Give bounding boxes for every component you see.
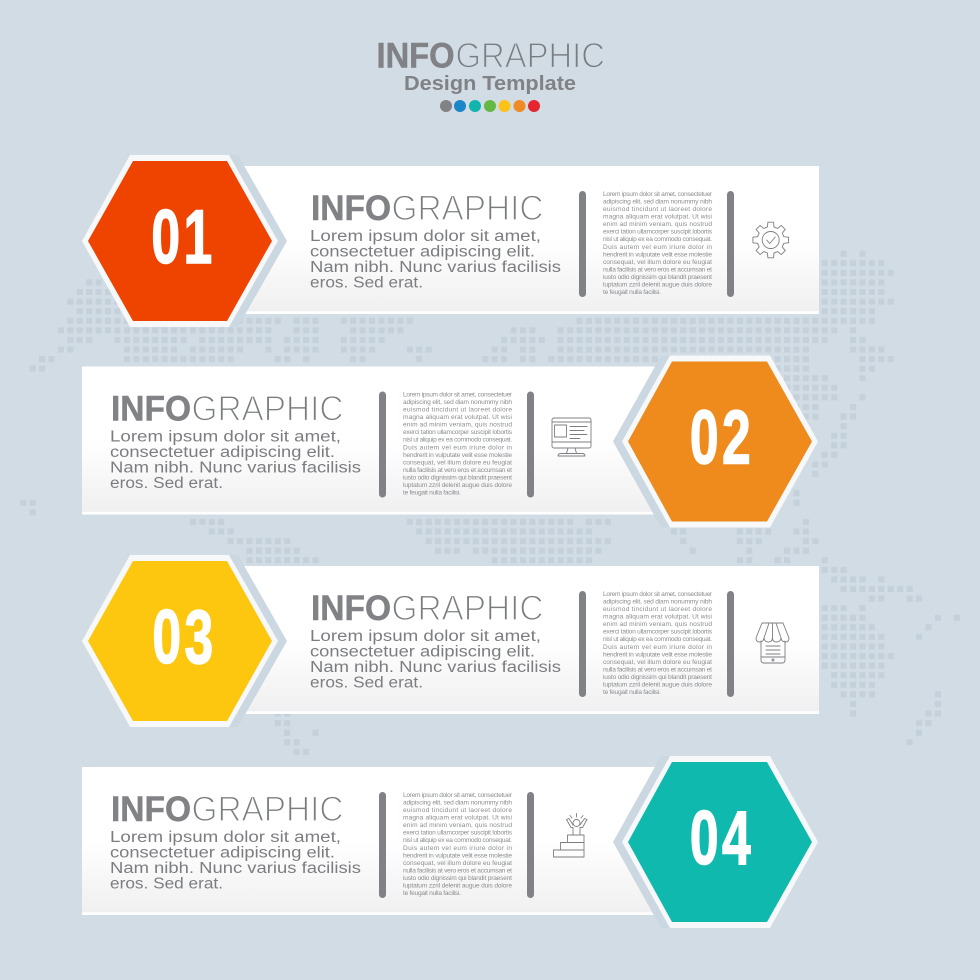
heading <box>111 390 344 428</box>
intro text: eros. Sed erat. <box>310 674 423 692</box>
panel background <box>240 566 819 714</box>
body text: hendrerit in vulputate velit esse molestie <box>603 251 712 258</box>
body text: hendrerit in vulputate velit esse molestie <box>603 651 712 658</box>
right divider bar <box>727 191 734 297</box>
body text: adipiscing elit, sed diam nonummy nibh <box>403 800 512 806</box>
body text: magna aliquam erat volutpat. Ut wisi <box>403 815 513 822</box>
intro text <box>110 829 361 892</box>
intro text: eros. Sed erat. <box>110 475 223 492</box>
body text: iusto odio dignissim qui blandit praesent <box>603 274 712 281</box>
body text: enim ad minim veniam, quis nostrud <box>403 822 512 829</box>
body text: hendrerit in vulputate velit esse molestie <box>403 452 512 459</box>
body text: nulla facilisis at vero eros et accumsan et <box>603 266 712 273</box>
left divider bar <box>379 792 386 898</box>
panel background <box>82 366 672 514</box>
body text <box>403 392 513 496</box>
body text: nisl ut aliquip ex ea commodo consequat. <box>603 236 712 243</box>
icon: person on top of stairs <box>554 814 587 857</box>
body text: magna aliquam erat volutpat. Ut wisi <box>603 614 713 621</box>
body text: exerci tation ullamcorper suscipit lobortis <box>403 429 513 436</box>
body text: consequat, vel illum dolore eu feugiat <box>403 459 512 466</box>
body text: Duis autem vel eum iriure dolor in <box>603 244 712 251</box>
body text: iusto odio dignissim qui blandit praesent <box>603 674 712 681</box>
icon: mobile storefront <box>756 623 789 663</box>
body text: consequat, vel illum dolore eu feugiat <box>603 259 712 266</box>
body text: consequat, vel illum dolore eu feugiat <box>603 659 712 666</box>
body text: exerci tation ullamcorper suscipit lobortis <box>603 229 713 236</box>
body text: Lorem ipsum dolor sit amet, consectetuer <box>403 392 513 398</box>
icon: desktop monitor <box>552 418 591 456</box>
heading <box>311 589 544 628</box>
number 03: 03 <box>152 594 217 679</box>
body text: enim ad minim veniam, quis nostrud <box>603 621 712 628</box>
body text: enim ad minim veniam, quis nostrud <box>403 422 512 429</box>
panel: step 03 <box>82 555 819 727</box>
body text: exerci tation ullamcorper suscipit lobortis <box>603 629 713 636</box>
intro text: consectetuer adipiscing elit. <box>110 444 335 461</box>
intro text: consectetuer adipiscing elit. <box>110 844 335 862</box>
body text: adipiscing elit, sed diam nonummy nibh <box>603 598 712 606</box>
heading <box>311 189 544 228</box>
number 04: 04 <box>690 795 754 880</box>
heading: GRAPHIC <box>392 589 544 628</box>
hexagon 01 <box>88 161 272 321</box>
body text: magna aliquam erat volutpat. Ut wisi <box>403 414 513 421</box>
intro text: eros. Sed erat. <box>310 274 423 292</box>
body text: Lorem ipsum dolor sit amet, consectetuer <box>603 591 713 598</box>
hexagon border <box>622 756 818 928</box>
heading <box>111 790 344 829</box>
intro text: Lorem ipsum dolor sit amet, <box>110 829 341 846</box>
body text: euismod tincidunt ut laoreet dolore <box>603 606 712 613</box>
body text: nisl ut aliquip ex ea commodo consequat. <box>603 636 712 643</box>
body text: Duis autem vel eum iriure dolor in <box>403 444 512 451</box>
intro text: Lorem ipsum dolor sit amet, <box>310 228 541 245</box>
body text: hendrerit in vulputate velit esse molestie <box>403 852 512 859</box>
panel: step 04 <box>82 756 818 928</box>
hexagon shadow <box>613 756 770 928</box>
heading: GRAPHIC <box>192 390 344 428</box>
right divider bar <box>527 792 534 898</box>
body text: luptatum zzril delenit augue duis dolore <box>403 482 512 489</box>
title: INFO bold part: INFO <box>376 36 454 76</box>
left divider bar <box>579 591 586 697</box>
body text: te feugait nulla facilisi. <box>403 490 461 496</box>
body text: luptatum zzril delenit augue duis dolore <box>603 282 712 288</box>
body text: Duis autem vel eum iriure dolor in <box>403 845 512 852</box>
colour dots <box>440 100 540 112</box>
body text: Lorem ipsum dolor sit amet, consectetuer <box>403 792 513 799</box>
number 01: 01 <box>151 194 216 279</box>
heading: INFO <box>111 390 191 428</box>
body text: nulla facilisis at vero eros et accumsan et <box>603 666 712 673</box>
right divider bar <box>727 591 734 697</box>
left divider bar <box>579 191 586 297</box>
intro text <box>310 628 561 692</box>
hexagon border <box>622 356 818 528</box>
panel: step 02 <box>82 356 818 528</box>
body text: euismod tincidunt ut laoreet dolore <box>603 206 712 213</box>
hexagon border <box>82 155 278 327</box>
body text: nulla facilisis at vero eros et accumsan et <box>403 467 512 474</box>
body text: nulla facilisis at vero eros et accumsan et <box>403 867 512 874</box>
hexagon 03 <box>88 561 272 721</box>
heading: GRAPHIC <box>192 790 344 829</box>
body text: euismod tincidunt ut laoreet dolore <box>403 807 512 814</box>
heading: GRAPHIC <box>392 189 544 228</box>
intro text: consectetuer adipiscing elit. <box>310 244 535 260</box>
title: GRAPHIC light part: GRAPHIC <box>456 36 605 76</box>
body text: luptatum zzril delenit augue duis dolore <box>403 882 512 890</box>
panel background <box>82 767 672 915</box>
heading: INFO <box>311 589 391 628</box>
left divider bar <box>379 392 386 498</box>
intro text: consectetuer adipiscing elit. <box>310 644 535 660</box>
panel background <box>240 166 819 314</box>
intro text: Nam nibh. Nunc varius facilisis <box>110 860 361 877</box>
intro text: eros. Sed erat. <box>110 876 223 892</box>
body text <box>403 792 513 897</box>
subtitle: Design Template <box>404 73 576 95</box>
intro text: Nam nibh. Nunc varius facilisis <box>310 659 561 676</box>
body text: consequat, vel illum dolore eu feugiat <box>403 860 512 867</box>
body text: adipiscing elit, sed diam nonummy nibh <box>603 198 712 206</box>
body text: Duis autem vel eum iriure dolor in <box>603 644 712 651</box>
body text: Lorem ipsum dolor sit amet, consectetuer <box>603 191 713 198</box>
hexagon 04 <box>628 762 812 922</box>
body text: nisl ut aliquip ex ea commodo consequat. <box>403 837 512 844</box>
hexagon shadow <box>139 155 287 327</box>
body text <box>603 591 713 696</box>
hexagon shadow <box>139 555 287 727</box>
heading: INFO <box>111 790 191 829</box>
body text: te feugait nulla facilisi. <box>603 289 661 296</box>
body text: nisl ut aliquip ex ea commodo consequat. <box>403 437 512 444</box>
intro text <box>310 228 561 292</box>
body text: enim ad minim veniam, quis nostrud <box>603 221 712 228</box>
number 02: 02 <box>690 395 754 480</box>
body text: magna aliquam erat volutpat. Ut wisi <box>603 214 713 221</box>
panel: step 01 <box>82 155 819 327</box>
hexagon border <box>82 555 278 727</box>
body text: exerci tation ullamcorper suscipit lobortis <box>403 830 513 837</box>
body text: euismod tincidunt ut laoreet dolore <box>403 406 512 414</box>
body text: iusto odio dignissim qui blandit praesent <box>403 474 512 482</box>
body text: te feugait nulla facilisi. <box>603 689 661 696</box>
right divider bar <box>527 392 534 498</box>
intro text: Nam nibh. Nunc varius facilisis <box>310 259 561 276</box>
dotted world map background <box>20 254 960 752</box>
body text: iusto odio dignissim qui blandit praesent <box>403 875 512 882</box>
body text: te feugait nulla facilisi. <box>403 890 461 897</box>
intro text: Lorem ipsum dolor sit amet, <box>310 628 541 645</box>
body text <box>603 191 713 296</box>
intro text <box>110 428 361 492</box>
icon: gear with check <box>753 222 788 258</box>
page title block <box>376 36 605 112</box>
body text: adipiscing elit, sed diam nonummy nibh <box>403 399 512 406</box>
body text: luptatum zzril delenit augue duis dolore <box>603 682 712 688</box>
intro text: Nam nibh. Nunc varius facilisis <box>110 460 361 476</box>
hexagon 02 <box>628 362 812 522</box>
intro text: Lorem ipsum dolor sit amet, <box>110 428 341 446</box>
heading: INFO <box>311 189 391 228</box>
hexagon shadow <box>613 356 770 528</box>
